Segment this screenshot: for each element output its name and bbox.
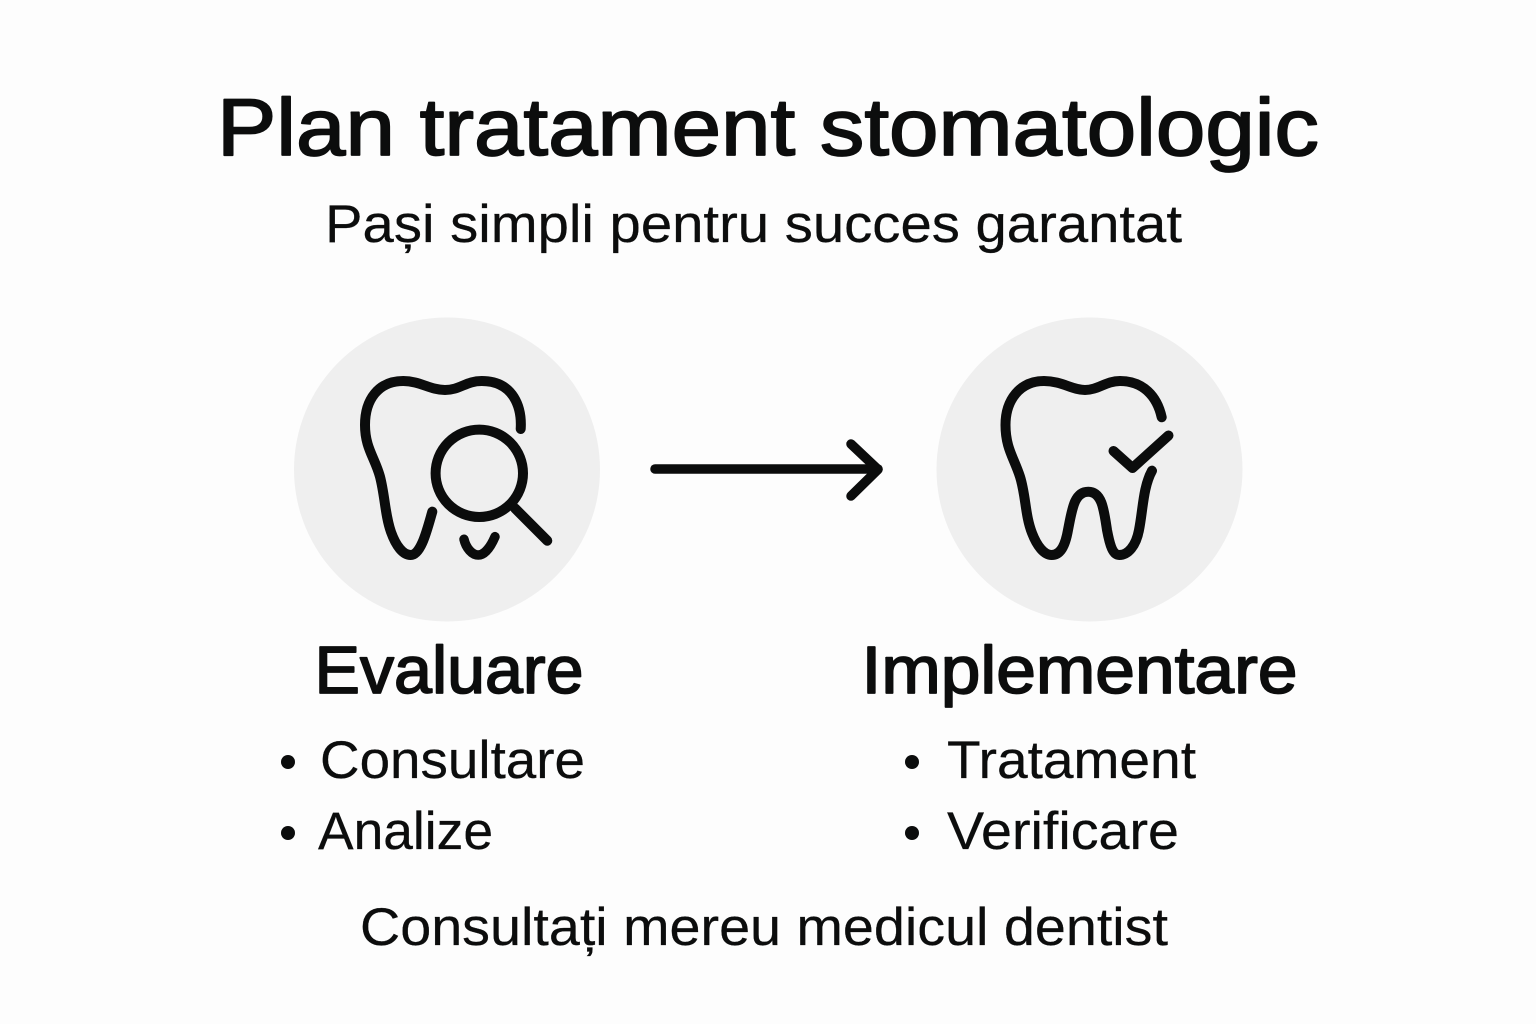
heading: Implementare: Implementare xyxy=(862,633,1298,708)
icon: magnifying glass xyxy=(436,430,547,541)
icon: check mark xyxy=(1114,436,1168,468)
icon: tooth root fragment xyxy=(464,537,495,555)
subtitle: Pași simpli pentru succes garantat xyxy=(325,195,1182,254)
list: evaluation steps: Consultare xyxy=(320,731,585,790)
heading: Evaluare: Evaluare xyxy=(314,633,584,708)
list: evaluation steps: Analize xyxy=(318,802,493,861)
list: implementation steps: Tratament xyxy=(947,731,1196,790)
icon: tooth outline xyxy=(365,381,521,555)
panel: evaluation icon xyxy=(294,318,600,622)
list: implementation steps xyxy=(905,731,1196,861)
title: Plan tratament stomatologic xyxy=(217,83,1319,173)
arrow xyxy=(655,444,878,496)
list: evaluation steps xyxy=(281,731,585,861)
list: implementation steps: Verificare xyxy=(947,802,1179,861)
icon: tooth outline xyxy=(1006,381,1162,555)
footer note: Consultați mereu medicul dentist xyxy=(360,898,1168,957)
panel: implementation icon xyxy=(936,318,1242,622)
